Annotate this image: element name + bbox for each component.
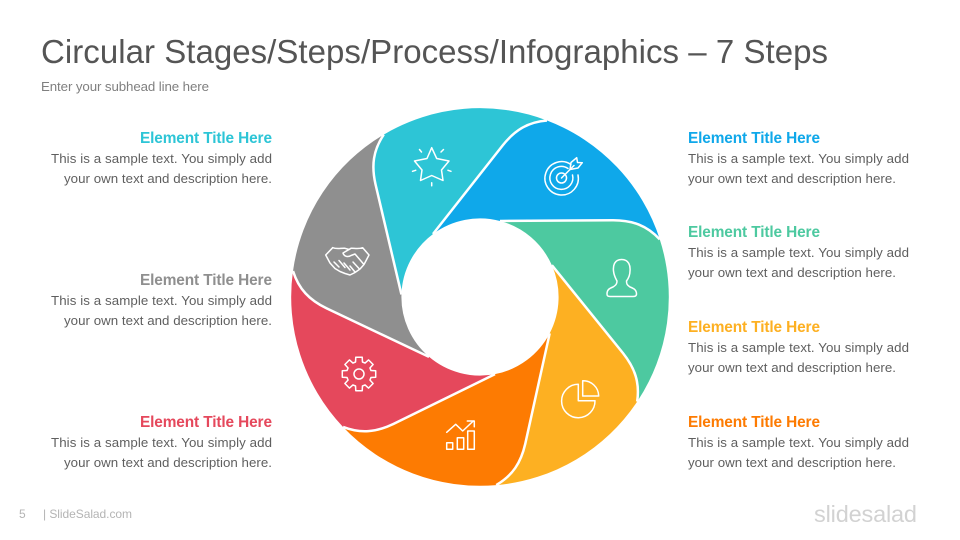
text block: teal element — [51, 130, 272, 186]
segment: yellow — [496, 264, 663, 512]
text block: green element: Element Title Here — [688, 224, 820, 241]
text block: green element — [688, 224, 909, 280]
title: Circular Stages/Steps/Process/Infographics – 7 Steps — [41, 33, 828, 70]
footer: page number and site: | SlideSalad.com — [43, 507, 132, 521]
circular diagram — [241, 46, 730, 534]
text block: yellow element — [688, 319, 909, 375]
segment: orange — [343, 329, 599, 534]
text block: orange element: This is a sample text. You simply add — [688, 435, 909, 450]
text block: blue element: Element Title Here — [688, 130, 820, 147]
text block: yellow element: Element Title Here — [688, 319, 820, 336]
icon: target — [545, 158, 582, 195]
icon: handshake — [326, 248, 369, 275]
icon: growth chart — [447, 421, 474, 449]
text block: teal element: Element Title Here — [140, 130, 272, 147]
text block: blue element: your own text and description here. — [688, 171, 896, 186]
text block: yellow element: This is a sample text. You simply add — [688, 340, 909, 355]
logo: slidesalad: slidesalad — [814, 501, 917, 527]
icon: star — [412, 148, 451, 186]
text block: grey element: Element Title Here — [140, 272, 272, 289]
text block: red element: This is a sample text. You simply add — [51, 435, 272, 450]
text block: teal element: This is a sample text. You simply add — [51, 151, 272, 166]
icon: pie chart — [562, 381, 599, 418]
text block: grey element: This is a sample text. You simply add — [51, 293, 272, 308]
text block: blue element — [688, 130, 909, 186]
text block: red element: Element Title Here — [140, 414, 272, 431]
icon: gear — [342, 357, 376, 391]
segment: teal — [313, 46, 547, 298]
text block: orange element: Element Title Here — [688, 414, 820, 431]
text block: blue element: This is a sample text. You simply add — [688, 151, 909, 166]
text block: green element: This is a sample text. You simply add — [688, 245, 909, 260]
text block: grey element: your own text and description here. — [64, 313, 272, 328]
text block: teal element: your own text and description here. — [64, 171, 272, 186]
subhead: Enter your subhead line here — [41, 79, 209, 94]
segment: blue — [433, 120, 660, 239]
text block: orange element — [688, 414, 909, 470]
footer: page number and site: 5 — [19, 507, 26, 521]
segment: grey — [268, 135, 434, 382]
text block: red element: your own text and description here. — [64, 455, 272, 470]
text block: red element — [51, 414, 272, 470]
segment: red — [241, 271, 497, 476]
icon: person — [607, 260, 636, 296]
segment: green — [496, 150, 730, 402]
text block: orange element: your own text and description here. — [688, 455, 896, 470]
text block: grey element — [51, 272, 272, 328]
text block: yellow element: your own text and description here. — [688, 360, 896, 375]
text block: green element: your own text and description here. — [688, 265, 896, 280]
